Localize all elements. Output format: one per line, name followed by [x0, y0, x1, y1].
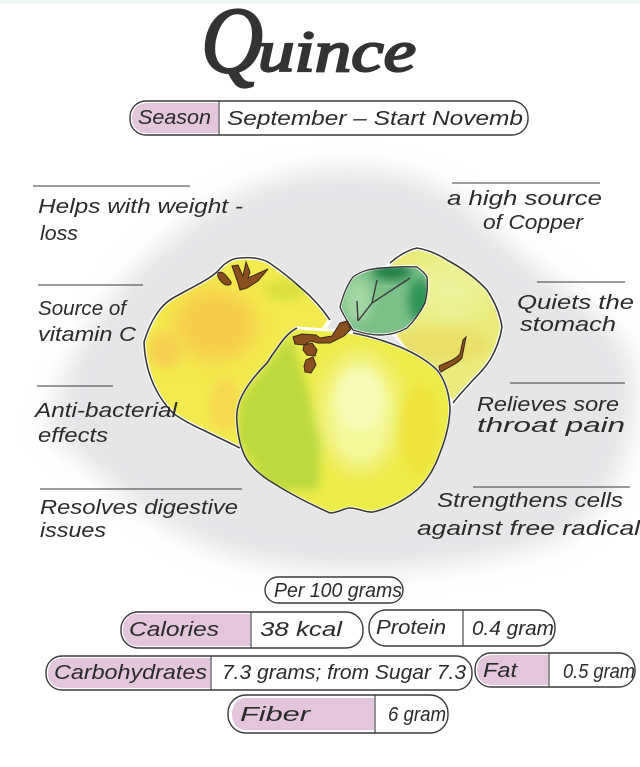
benefit: sore throat: Relieves sore [477, 394, 619, 416]
benefit: digestive: issues [40, 520, 106, 542]
benefit: free radicals: against free radical [417, 518, 640, 540]
benefit: copper: of Copper [483, 212, 585, 234]
leaf [340, 264, 432, 335]
benefit: sore throat: throat pain [477, 415, 625, 437]
benefit: weight loss: loss [40, 223, 78, 245]
benefit: vitamin C [38, 285, 143, 346]
title [201, 0, 416, 93]
season pill: September – Start Novemb [227, 108, 523, 130]
benefit: anti-bacterial [34, 386, 178, 447]
quince: left [144, 258, 330, 448]
protein pill: 0.4 gram [472, 618, 554, 640]
benefit: vitamin C: vitamin C [38, 324, 137, 346]
carbohydrates pill: Carbohydrates [54, 662, 207, 684]
benefit: copper [447, 183, 602, 234]
carbohydrates pill [46, 656, 472, 690]
season pill: Season [138, 107, 211, 129]
benefit: free radicals: Strengthens cells [437, 490, 623, 512]
benefit: digestive: Resolves digestive [40, 497, 238, 519]
benefit: sore throat [477, 383, 625, 437]
benefit: stomach: Quiets the [517, 292, 634, 314]
benefit: copper: a high source [447, 188, 602, 210]
protein pill: Protein [376, 617, 446, 639]
calories pill: Calories [129, 619, 219, 641]
fat pill [475, 653, 635, 687]
protein pill [369, 610, 555, 646]
fat pill: 0.5 gram [563, 661, 635, 683]
illustration: quinces [144, 248, 502, 513]
benefit: free radicals [417, 487, 640, 540]
benefit: weight loss [33, 186, 243, 245]
fiber pill: 6 gram [388, 704, 446, 726]
benefit: stomach [517, 282, 634, 336]
benefit: anti-bacterial: Anti-bacterial [34, 400, 178, 422]
benefit: weight loss: Helps with weight - [38, 196, 243, 218]
benefit: anti-bacterial: effects [38, 425, 108, 447]
calories pill: 38 kcal [260, 619, 343, 641]
benefit: stomach: stomach [520, 314, 616, 336]
calories pill [121, 612, 363, 648]
benefit: digestive [40, 489, 242, 542]
quince: front [237, 321, 450, 513]
benefit: vitamin C: Source of [38, 298, 129, 320]
background wash [0, 0, 640, 571]
carbohydrates pill: 7.3 grams; from Sugar 7.3 [222, 662, 466, 684]
quince: back [385, 246, 504, 406]
per 100 gram pill: Per 100 grams [274, 580, 402, 602]
fiber pill: Fiber [240, 704, 312, 726]
fiber pill [228, 695, 448, 733]
fat pill: Fat [483, 660, 519, 682]
season pill [130, 101, 528, 135]
title: uince [258, 19, 416, 84]
